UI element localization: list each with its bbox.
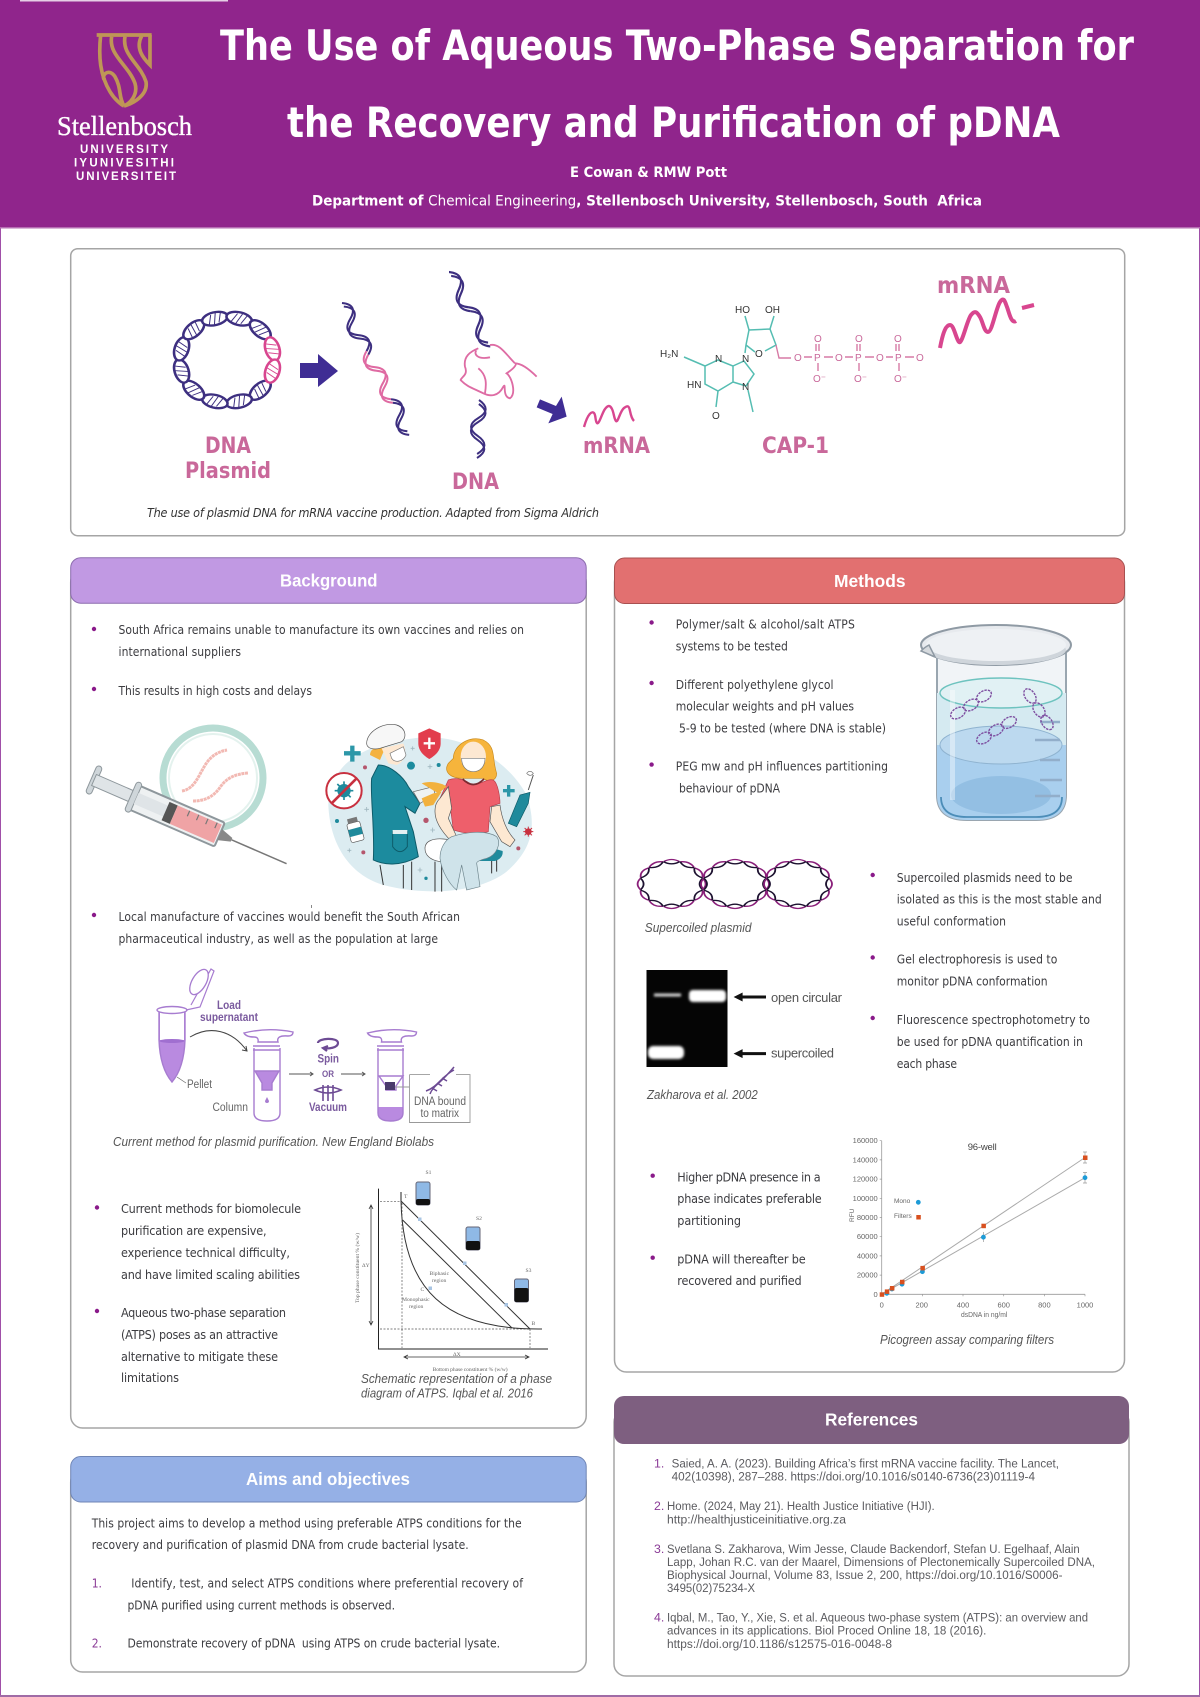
text: ATPS bullets: limitations	[121, 1370, 179, 1385]
text: ATPS bullets: alternative to mitigate these	[121, 1349, 278, 1364]
chart labels: S1	[426, 1170, 432, 1176]
diagram: CAP-1 chemical structure: OH	[765, 305, 780, 316]
icon: crossed-out virus	[326, 773, 362, 808]
chart labels: C	[420, 1287, 424, 1293]
chart: picogreen assay line chart: 0	[874, 1290, 878, 1299]
caption: supercoiled plasmid: Supercoiled plasmid	[645, 921, 752, 935]
axis label: RFU: RFU	[849, 1208, 856, 1222]
icon: shield crest	[97, 35, 152, 106]
text: partitioning bullets	[650, 1170, 822, 1288]
reference 3: 3.	[654, 1542, 664, 1556]
diagram: CAP-1 chemical structure: O	[894, 334, 902, 345]
text: partitioning bullets: recovered and purified	[677, 1273, 802, 1288]
caption: phase diagram: diagram of ATPS. Iqbal et al. 2016	[361, 1387, 533, 1401]
label: DNA Plasmid	[185, 434, 271, 484]
chart labels: S3	[526, 1268, 532, 1274]
diagram: plasmid purification workflow	[157, 966, 470, 1122]
caption: phase diagram	[361, 1372, 552, 1401]
diagram: CAP-1 chemical structure: H₂N	[660, 349, 678, 360]
callout: DNA bound to matrix: to matrix	[420, 1108, 459, 1120]
text: conformation and quantification bullets: be used for pDNA quantification in	[897, 1035, 1083, 1049]
panel: aims and objectives	[71, 1456, 586, 1672]
diagram: CAP-1 chemical structure: O	[916, 353, 924, 364]
diagram: CAP-1 chemical structure: O	[855, 334, 863, 345]
text: ATPS system bullets: molecular weights and pH values	[676, 700, 854, 714]
text: conformation and quantification bullets: isolated as this is the most stable and	[897, 893, 1102, 907]
diagram: CAP-1 chemical structure: O⁻	[813, 374, 826, 385]
caption: picogreen: Picogreen assay comparing filters	[880, 1333, 1054, 1347]
logo: Stellenbosch University	[57, 35, 192, 183]
text: vaccine supply bullets	[92, 623, 524, 698]
panel: background	[71, 558, 586, 1428]
legend: Mono	[894, 1198, 911, 1205]
label: mRNA: mRNA	[583, 434, 651, 459]
chart labels: Top phase constituent % (w/w)	[354, 1233, 361, 1303]
text: ATPS system bullets: Different polyethylene glycol	[676, 678, 834, 692]
reference 2: 2.	[654, 1499, 664, 1513]
arrow: DNA to mRNA	[537, 397, 567, 423]
label: open circular: open circular	[771, 990, 843, 1005]
text: ATPS system bullets: behaviour of pDNA	[679, 782, 781, 796]
list: objectives: 1.	[92, 1577, 102, 1591]
chart title: 96-well	[968, 1142, 997, 1153]
caption: phase diagram: Schematic representation of a phase	[361, 1372, 552, 1386]
diagram: CAP-1 chemical structure: O⁻	[854, 374, 867, 385]
text: ATPS system bullets	[649, 618, 888, 796]
text: ATPS bullets: Aqueous two-phase separation	[121, 1305, 286, 1320]
heading: aims and objectives	[71, 1456, 586, 1502]
icon: vial S1	[416, 1182, 430, 1205]
legend	[894, 1198, 921, 1220]
heading: aims and objectives: Aims and objectives	[246, 1469, 410, 1489]
label: load supernatant	[200, 1000, 258, 1024]
chart labels: region	[409, 1304, 423, 1310]
reference 4: 4.	[654, 1611, 664, 1625]
label: DNA Plasmid: Plasmid	[185, 459, 271, 484]
heading: methods: Methods	[834, 571, 906, 591]
caption: purification method: Current method for plasmid purification. New England Biolabs	[113, 1135, 434, 1149]
text: ATPS bullets	[95, 1201, 301, 1385]
list: objectives	[92, 1577, 524, 1651]
reference 3: 3495(02)75234-X	[667, 1581, 755, 1595]
reference 3: Svetlana S. Zakharova, Wim Jesse, Claude Backendorf, Stefan U. Egelhaaf, Alain	[667, 1542, 1080, 1556]
heading: background	[71, 558, 586, 603]
series: Filters	[880, 1156, 1088, 1297]
list: objectives: 2.	[92, 1637, 102, 1651]
chart labels: Biphasic	[430, 1271, 450, 1277]
title: The Use of Aqueous Two-Phase Separation for	[220, 21, 1134, 70]
label: load supernatant: Load	[217, 1000, 241, 1012]
header banner	[0, 0, 1200, 228]
axis label: dsDNA: dsDNA in ng/ml	[961, 1310, 1008, 1319]
logo: Stellenbosch University: IYUNIVESITHI	[74, 158, 174, 170]
label: pellet: Pellet	[187, 1079, 213, 1091]
diagram: CAP-1 chemical structure: N	[715, 354, 722, 365]
chart: picogreen assay line chart: 40000	[857, 1251, 878, 1260]
label: DNA: DNA	[452, 470, 500, 495]
chart: picogreen assay line chart: 80000	[857, 1213, 878, 1222]
chart: picogreen assay line chart: 20000	[857, 1271, 878, 1280]
authors: E Cowan & RMW Pott	[570, 165, 727, 181]
icon: linearised DNA strand	[336, 300, 415, 438]
text: conformation and quantification bullets: Fluorescence spectrophotometry to	[897, 1013, 1090, 1027]
text: ATPS system bullets: Polymer/salt & alcohol/salt ATPS	[676, 618, 855, 632]
label: CAP-1: CAP-1	[762, 434, 829, 459]
text: ATPS bullets: purification are expensive,	[121, 1223, 267, 1238]
caption: Zakharova citation: Zakharova et al. 2002	[646, 1088, 758, 1102]
list: objectives: pDNA purified using current methods is observed.	[128, 1598, 395, 1612]
chart labels: Monophasic	[402, 1297, 430, 1303]
text: partitioning bullets: partitioning	[677, 1213, 741, 1228]
chart: picogreen assay line chart: 800	[1038, 1300, 1051, 1310]
reference 4: Iqbal, M., Tao, Y., Xie, S. et al. Aqueous two-phase system (ATPS): an overview and	[667, 1611, 1088, 1625]
list: objectives: Demonstrate recovery of pDNA using ATPS on crude bacterial lysate.	[128, 1637, 500, 1651]
text: ATPS system bullets: 5-9 to be tested (where DNA is stable)	[679, 722, 886, 736]
reference 2: Home. (2024, May 21). Health Justice Initiative (HJI).	[667, 1499, 935, 1513]
arrow: open circular	[734, 992, 766, 1002]
diagram: CAP-1 chemical structure: P	[814, 353, 821, 364]
text: ATPS bullets: Current methods for biomolecule	[121, 1201, 301, 1216]
arrow: spin to column	[341, 1072, 365, 1076]
heading: background: Background	[280, 571, 378, 591]
diagram: CAP-1 chemical structure: N	[742, 382, 749, 393]
reference 4	[654, 1611, 1088, 1651]
diagram: CAP-1 chemical structure	[660, 305, 924, 422]
arrow: supercoiled	[734, 1049, 766, 1058]
chart: ATPS phase diagram	[354, 1170, 548, 1373]
decorative dots	[335, 746, 520, 880]
label: mRNA top: mRNA	[937, 273, 1010, 299]
label: supercoiled: supercoiled	[771, 1046, 834, 1060]
diagram: CAP-1 chemical structure: HN	[687, 380, 701, 391]
icon: small teal virus	[407, 762, 415, 770]
text: conformation and quantification bullets: Gel electrophoresis is used to	[897, 953, 1058, 967]
diagram: CAP-1 chemical structure: O⁻	[894, 374, 907, 385]
logo: Stellenbosch University: Stellenbosch	[57, 111, 192, 141]
caption: The use of plasmid DNA for mRNA vaccine production. Adapted from Sigma Aldrich	[147, 505, 599, 520]
icon: beaker with two phases and plasmids	[921, 625, 1071, 820]
chart labels	[354, 1170, 536, 1373]
callout: DNA bound to matrix: DNA bound	[414, 1096, 466, 1108]
reference 1: Saied, A. A. (2023). Building Africa’s first mRNA vaccine facility. The Lancet,	[672, 1456, 1059, 1470]
icon: patient and stool	[380, 739, 515, 892]
icon: microcentrifuge tube	[157, 966, 214, 1082]
chart: picogreen assay line chart: 200	[915, 1300, 928, 1310]
chart labels: Bottom phase constituent % (w/w)	[433, 1366, 508, 1373]
panel: plasmid DNA to mRNA overview	[71, 249, 1125, 536]
chart labels: T	[404, 1194, 408, 1200]
icon: DNA plasmid ring	[171, 309, 283, 411]
diagram: CAP-1 chemical structure: O	[876, 353, 884, 364]
icon: small syringe	[508, 771, 533, 827]
diagram: CAP-1 chemical structure: HO	[735, 305, 750, 316]
chart: picogreen assay line chart: 400	[957, 1300, 969, 1310]
icon: supercoiled plasmid	[638, 860, 832, 908]
reference 2	[654, 1499, 935, 1526]
diagram: CAP-1 chemical structure: P	[855, 353, 862, 364]
icon: syringe with mRNA capsule	[85, 728, 293, 878]
arrow: column to spin	[289, 1072, 313, 1076]
text: vaccine supply bullets: South Africa remains unable to manufacture its own vaccines and relies on	[118, 623, 524, 637]
icon: red virus	[523, 827, 533, 837]
label: load supernatant: supernatant	[200, 1012, 258, 1024]
icon: vaccine vial	[345, 816, 364, 843]
text: vaccine supply bullets: This results in high costs and delays	[118, 684, 312, 698]
reference 3	[654, 1542, 1095, 1595]
icon: vial S2	[466, 1227, 480, 1250]
chart: picogreen assay line chart: 100000	[853, 1194, 878, 1203]
text: ATPS bullets: (ATPS) poses as an attractive	[121, 1327, 278, 1342]
text: project aim	[91, 1516, 522, 1552]
icon: DNA template with transcription tangle	[443, 269, 537, 458]
icon: spin	[318, 1039, 338, 1051]
reference 3: Lapp, Johan R.C. van der Maarel, Dimensions of Plectonemically Supercoiled DNA,	[667, 1555, 1095, 1569]
icon: spin column with bound DNA	[368, 1030, 416, 1121]
diagram: CAP-1 chemical structure: O	[755, 349, 763, 360]
reference 1: 1.	[654, 1456, 664, 1470]
callout: DNA bound to matrix	[395, 1067, 470, 1122]
chart: picogreen assay line chart: 600	[997, 1300, 1010, 1310]
text: vaccine supply bullets: international suppliers	[118, 645, 241, 659]
text: project aim: This project aims to develop a method using preferable ATPS conditions for the	[91, 1516, 522, 1530]
diagram: CAP-1 chemical structure: O	[712, 411, 720, 422]
affiliation: Department of Chemical Engineering , Stellenbosch University, Stellenbosch, South Africa	[312, 194, 982, 210]
icon: spin column with lysate	[244, 1030, 293, 1121]
text: project aim: recovery and purification of plasmid DNA from crude bacterial lysate.	[92, 1538, 469, 1552]
chart: gel electrophoresis	[646, 970, 843, 1067]
diagram: CAP-1 chemical structure: N	[742, 354, 749, 365]
text: ATPS system bullets: systems to be tested	[676, 639, 788, 653]
text: local manufacture bullet: pharmaceutical industry, as well as the population at large	[118, 932, 438, 946]
label: spin: Spin	[318, 1054, 339, 1066]
arrow: load into column	[190, 1031, 247, 1051]
text: conformation and quantification bullets: monitor pDNA conformation	[897, 974, 1048, 988]
text: conformation and quantification bullets: Supercoiled plasmids need to be	[897, 871, 1073, 885]
reference 3: Biophysical Journal, Volume 83, Issue 2, 200, https://doi.org/10.1016/S0006-	[667, 1568, 1062, 1582]
panel: references	[614, 1396, 1129, 1676]
icon: shield	[418, 728, 441, 759]
text: conformation and quantification bullets: useful conformation	[897, 914, 1006, 928]
text: local manufacture bullet: Local manufacture of vaccines would benefit the South African	[118, 910, 460, 924]
reference 4: advances in its applications. Biol Proced Online 18, 18 (2016).	[667, 1624, 986, 1638]
chart: picogreen assay line chart: 160000	[853, 1136, 878, 1145]
icon: capped mRNA squiggle	[940, 299, 1034, 348]
text: conformation and quantification bullets: each phase	[897, 1057, 957, 1071]
icon: teal plus	[344, 746, 361, 762]
chart: picogreen assay line chart	[849, 1136, 1093, 1319]
text: ATPS bullets: experience technical difficulty,	[121, 1245, 290, 1260]
icon: short mRNA squiggle	[584, 406, 634, 427]
diagram: CAP-1 chemical structure: P	[895, 353, 902, 364]
icon: vacuum	[315, 1085, 341, 1101]
label: or: OR	[322, 1069, 334, 1080]
legend: Filters	[894, 1213, 912, 1220]
title	[220, 21, 1134, 147]
diagram: CAP-1 chemical structure: O	[794, 353, 802, 364]
text: partitioning bullets: Higher pDNA presence in a	[677, 1170, 821, 1185]
heading: references: References	[825, 1410, 918, 1430]
chart labels: region	[432, 1278, 446, 1284]
label: DNA Plasmid: DNA	[205, 434, 252, 459]
heading: references	[614, 1396, 1129, 1444]
text: ATPS system bullets: PEG mw and pH influences partitioning	[676, 760, 888, 774]
chart: picogreen assay line chart: 0	[880, 1300, 884, 1310]
label: vacuum: Vacuum	[309, 1102, 347, 1114]
arrow: plasmid to linear DNA	[300, 354, 338, 387]
reference 1: 402(10398), 287–288. https://doi.org/10.1016/s0140-6736(23)01119-4	[672, 1469, 1035, 1483]
chart: picogreen assay line chart: 140000	[853, 1155, 878, 1164]
chart: picogreen assay line chart: 1000	[1077, 1300, 1093, 1310]
list: objectives: Identify, test, and select ATPS conditions where preferential recovery of	[131, 1577, 524, 1591]
text: partitioning bullets: pDNA will thereafter be	[677, 1252, 806, 1267]
icon: nurse vaccinating a patient	[326, 724, 533, 892]
diagram: CAP-1 chemical structure: O	[835, 353, 843, 364]
label: column: Column	[212, 1102, 248, 1114]
chart labels: ΔY	[362, 1263, 370, 1269]
text: partitioning bullets: phase indicates preferable	[677, 1191, 822, 1206]
title: the Recovery and Purification of pDNA	[287, 98, 1061, 147]
logo: Stellenbosch University: UNIVERSITEIT	[76, 171, 176, 183]
text: ATPS bullets: and have limited scaling abilities	[121, 1267, 300, 1282]
reference 2: http://healthjusticeinitiative.org.za	[667, 1512, 846, 1526]
icon: vial S3	[514, 1279, 528, 1302]
chart: picogreen assay line chart: 60000	[857, 1232, 878, 1241]
diagram: CAP-1 chemical structure: O	[814, 334, 822, 345]
chart labels: B	[532, 1321, 536, 1327]
reference 4: https://doi.org/10.1186/s12575-016-0048-8	[667, 1637, 892, 1651]
chart: picogreen assay line chart: 120000	[853, 1175, 878, 1184]
heading: methods	[614, 558, 1124, 604]
chart labels: ΔX	[453, 1352, 461, 1358]
text: local manufacture bullet	[92, 910, 460, 946]
panel: methods	[614, 558, 1124, 1372]
icon: nurse	[367, 724, 447, 864]
logo: Stellenbosch University: UNIVERSITY	[80, 144, 168, 156]
series: Mono	[884, 1175, 1087, 1296]
reference 1	[654, 1456, 1059, 1483]
text: conformation and quantification bullets	[870, 871, 1102, 1071]
chart labels: S2	[476, 1216, 482, 1222]
